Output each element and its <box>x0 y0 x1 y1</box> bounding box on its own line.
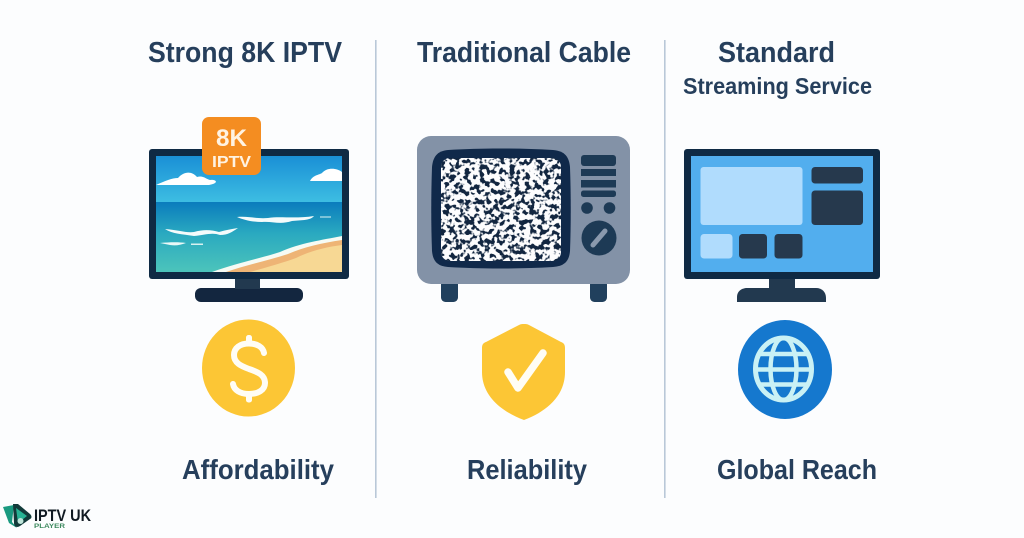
logo: IPTV UK Player: IPTV UK <box>34 506 92 525</box>
icon: dollar coin <box>202 320 295 416</box>
icon: flat TV with beach scene <box>149 117 349 302</box>
icon: globe <box>738 320 832 419</box>
divider left <box>375 40 377 498</box>
heading: Strong 8K IPTV: Strong 8K IPTV <box>148 37 343 69</box>
subheading: Streaming Service: Streaming Service <box>683 73 872 99</box>
heading: Standard: Standard <box>718 37 835 69</box>
logo: IPTV UK Player <box>3 504 92 530</box>
heading: Traditional Cable: Traditional Cable <box>417 37 631 69</box>
logo: IPTV UK Player: PLAYER <box>34 523 65 530</box>
column: Standard Streaming Service <box>683 37 880 485</box>
divider right <box>664 40 666 498</box>
label: Global Reach: Global Reach <box>717 454 877 485</box>
column: Strong 8K IPTV <box>148 37 349 485</box>
label: Reliability: Reliability <box>467 454 588 485</box>
label: Affordability: Affordability <box>182 454 335 485</box>
infographic canvas <box>3 40 880 528</box>
icon: shield with check <box>482 324 565 420</box>
badge: 8K IPTV: 8K <box>216 125 248 152</box>
column: Traditional Cable <box>417 37 631 485</box>
badge: 8K IPTV: IPTV <box>212 154 251 171</box>
badge: 8K IPTV <box>202 117 261 175</box>
icon: streaming monitor <box>684 149 880 302</box>
icon: old CRT TV with static <box>417 136 630 302</box>
